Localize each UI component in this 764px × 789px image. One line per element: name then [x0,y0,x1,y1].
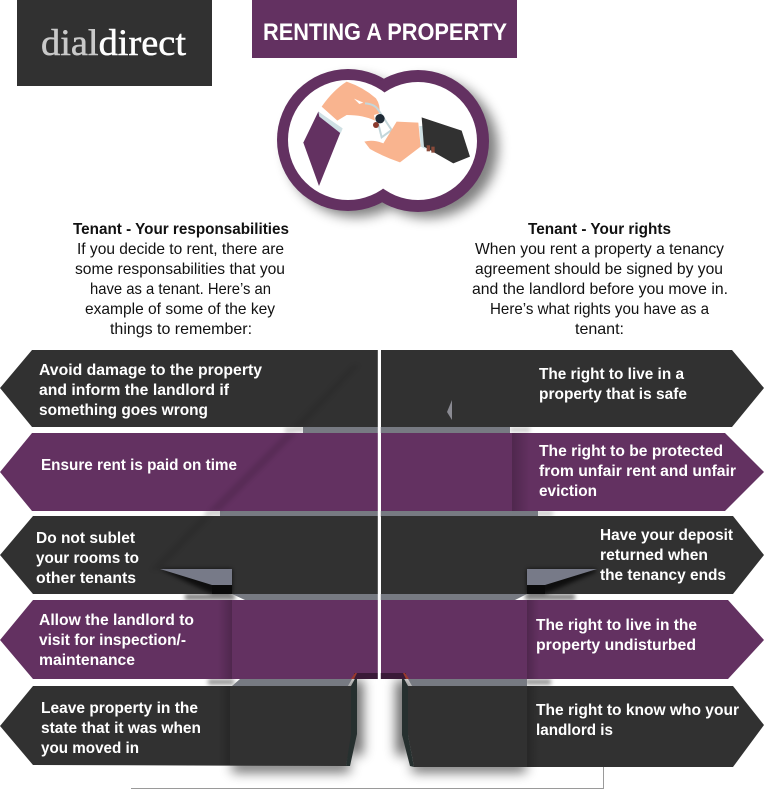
left body: some responsabilities that you [75,261,285,278]
panel: left responsibilities [0,350,378,766]
icon inner [288,80,477,200]
row 4 right banner: property undisturbed [536,637,696,654]
right intro text [472,221,728,338]
row 1 right banner: The right to live in a [539,366,684,383]
right body: Here’s what rights you have as a [490,301,709,318]
row 4 left banner [0,600,378,679]
right body: agreement should be signed by you [475,261,723,278]
row 5 left banner: state that it was when [41,720,201,737]
row 1 left banner: something goes wrong [39,402,208,419]
row 5 right banner: The right to know who your [536,702,739,719]
icon artwork [303,82,470,186]
left body: If you decide to rent, there are [77,241,284,258]
row 2 left banner [0,433,378,511]
row 3 right banner: Have your deposit [600,527,734,544]
row 5 right banner [402,675,764,767]
left intro text [73,221,289,338]
left body: example of some of the key [85,301,275,318]
fold strips [220,427,538,686]
row 1 right banner: property that is safe [539,386,687,403]
row 1 left banner [0,350,378,427]
row 3 left banner: your rooms to [36,550,139,567]
right body [472,241,728,338]
right body: and the landlord before you move in. [472,281,728,298]
row 5 left banner [0,675,357,766]
row 4 left banner: Allow the landlord to [39,612,194,629]
title banner [252,0,517,58]
panel: right rights [381,350,764,767]
row 4 right banner [381,600,764,679]
logo wordmark: dialdirect [41,23,187,64]
left heading: Tenant - Your responsabilities [73,221,289,238]
row 2 right banner [381,433,764,511]
icon shadow [286,77,498,218]
right heading: Tenant - Your rights [528,221,671,238]
centre divider [378,350,381,679]
row 1 left banner: Avoid damage to the property [39,362,262,379]
row 1 right banner [381,350,764,427]
left body: have as a tenant. Here’s an [90,281,271,298]
row 2 right banner: eviction [539,483,597,500]
row 3 left banner: Do not sublet [36,530,136,547]
row 3 right banner: the tenancy ends [600,567,726,584]
right body: When you rent a property a tenancy [475,241,724,258]
row 3 left banner [0,516,378,594]
row 4 left banner: visit for inspection/- [39,632,186,649]
row 4 right banner: The right to live in the [536,617,697,634]
bracket line [131,760,604,788]
row 5 left banner: you moved in [41,740,139,757]
row 2 right banner: from unfair rent and unfair [539,463,736,480]
row 3 right banner [381,516,764,594]
row 4 left banner: maintenance [39,652,135,669]
left body: things to remember: [110,321,252,338]
gap shadows [185,427,575,685]
logo panel [17,0,212,86]
bottom shadows [232,680,526,772]
notch top [351,673,409,679]
row 3 right banner: returned when [600,547,708,564]
row 3 left banner: other tenants [36,570,136,587]
icon ring [277,69,489,212]
right body: tenant: [575,321,624,338]
row 5 left banner: Leave property in the [41,700,198,717]
row 1 left banner: and inform the landlord if [39,382,230,399]
row 2 right banner: The right to be protected [539,443,723,460]
row 2 left banner: Ensure rent is paid on time [41,457,237,474]
icon: hands exchanging keys [277,69,498,218]
title text: RENTING A PROPERTY [263,19,507,46]
left body [75,241,285,338]
row 5 right banner: landlord is [536,722,613,739]
